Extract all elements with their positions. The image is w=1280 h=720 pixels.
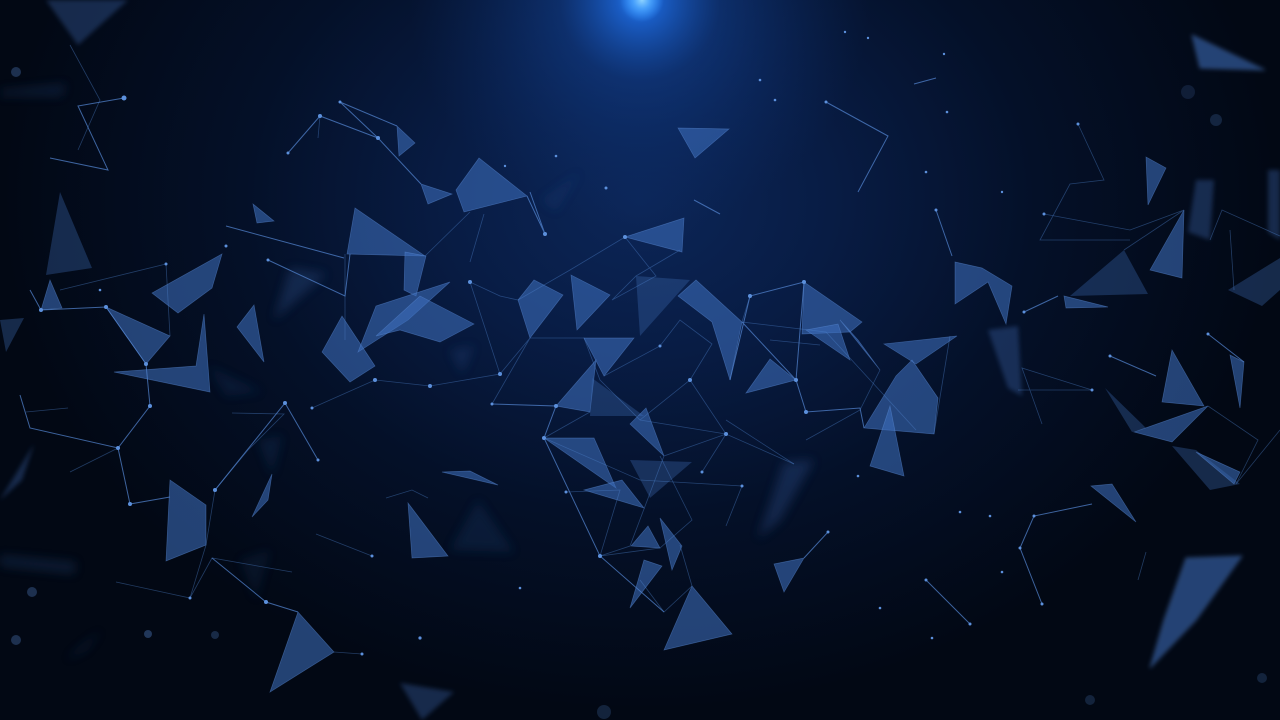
mesh: lower-left cluster	[116, 401, 374, 692]
mesh: centre-right cluster	[694, 78, 1094, 626]
top light glow	[0, 0, 1280, 300]
mesh: left cluster	[0, 45, 274, 506]
mesh: upper-centre-left cluster	[226, 100, 547, 558]
mesh: central cluster	[490, 128, 830, 650]
mesh: right cluster	[1018, 122, 1280, 606]
far out-of-focus shards	[0, 84, 814, 660]
